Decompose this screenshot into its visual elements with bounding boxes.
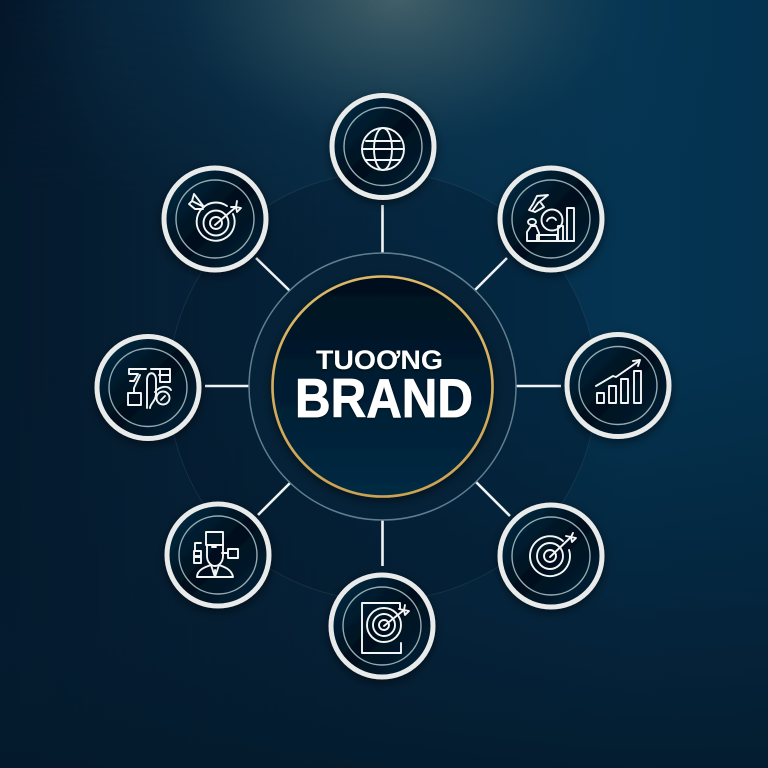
icon: target with arrow — [530, 533, 576, 576]
icon: person and charts — [194, 532, 238, 577]
icon: document and target — [362, 603, 409, 653]
node: circuit map — [97, 336, 199, 438]
icon: abstract blocks and paths — [128, 369, 171, 408]
hub gold circle — [272, 276, 492, 496]
icon: equipment and bars — [527, 195, 574, 241]
node: target — [500, 505, 602, 607]
icon: target with two arrows — [189, 194, 241, 241]
hub title — [295, 345, 473, 429]
node: growth chart — [567, 334, 669, 436]
connector lines — [205, 205, 561, 566]
faint outer orbit ring — [168, 172, 596, 600]
icon: globe — [362, 128, 404, 170]
node: globe — [332, 96, 434, 198]
node: bar chart with people — [500, 168, 602, 270]
node: arrows and target — [164, 168, 266, 270]
central hub — [249, 253, 516, 520]
hub title: BRAND — [295, 367, 473, 429]
hub title: TUOƠNG — [316, 345, 443, 375]
node: person with notes — [167, 504, 269, 606]
node: target on document — [331, 575, 433, 677]
icon: rising bars with arrow — [596, 360, 641, 403]
hub outer ring — [249, 253, 516, 520]
